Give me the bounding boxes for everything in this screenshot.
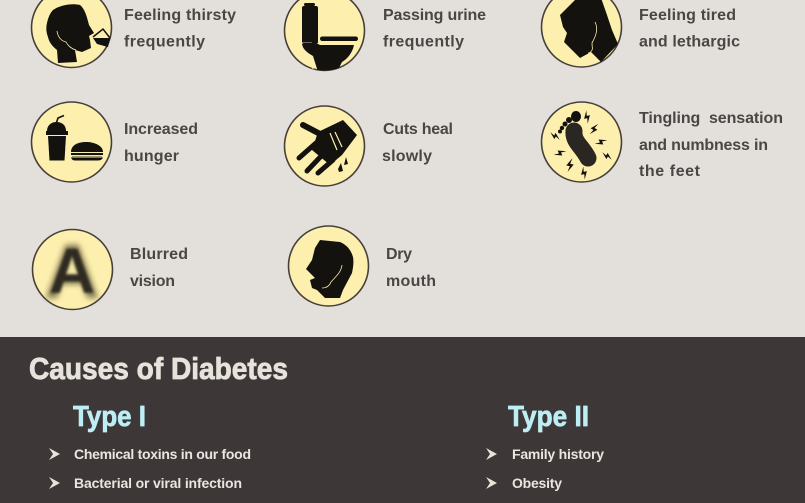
label: cuts heal slowly: Cuts heal [383, 121, 453, 138]
symptom: passing urine [284, 0, 486, 72]
heading: causes of diabetes: Causes of Diabetes [29, 351, 288, 386]
symptom: feeling thirsty [32, 0, 236, 68]
column: type I [49, 401, 251, 491]
label: increased hunger: hunger [124, 148, 179, 165]
label: passing urine frequently: Passing urine [383, 7, 486, 24]
bullet: bacterial or viral infection: Bacterial or viral infection [74, 475, 242, 491]
subheading: type I: Type I [73, 401, 146, 433]
symptom: dry mouth [288, 226, 436, 306]
icon: head drinking water [32, 0, 112, 68]
icon: foot with lightning bolts [542, 102, 622, 182]
icon: toilet [284, 0, 364, 72]
label: dry mouth [386, 246, 436, 290]
symptom: increased hunger [32, 102, 198, 182]
bullet: chemical toxins: Chemical toxins in our food [74, 446, 251, 462]
label: cuts heal slowly: slowly [382, 148, 432, 165]
label: feeling thirsty frequently: frequently [124, 34, 205, 50]
symptom: cuts heal slowly [284, 106, 453, 186]
icon: cut hand [284, 106, 364, 186]
icon: blurred letter A: A [49, 235, 95, 307]
subheading: type II: Type II [508, 401, 589, 433]
label: blurred vision [130, 246, 188, 290]
label: increased hunger: Increased [124, 121, 198, 138]
label: cuts heal slowly [382, 121, 453, 165]
label: tingling sensation and numbness in the feet [639, 110, 783, 180]
label: passing urine frequently [383, 7, 486, 50]
label: feeling tired and lethargic: and lethargic [639, 34, 740, 50]
label: dry mouth: Dry [386, 246, 412, 263]
label: blurred vision: Blurred [130, 246, 188, 263]
label: passing urine frequently: frequently [383, 34, 464, 50]
label: feeling tired and lethargic [639, 7, 740, 50]
icon: head bowed [542, 0, 622, 67]
label: tingling sensation and numbness in the feet: Tingling sensation [639, 110, 783, 127]
icon: blurred letter A: A [44, 227, 100, 315]
label: dry mouth: mouth [386, 273, 436, 290]
label: feeling tired and lethargic: Feeling tired [639, 7, 736, 24]
icon: head in profile [288, 226, 368, 306]
label: tingling sensation and numbness in the feet: and numbness in [639, 137, 768, 154]
panel: causes of diabetes [0, 337, 805, 503]
bullet: obesity: Obesity [512, 475, 562, 491]
symptom: tingling sensation [542, 102, 783, 182]
column: type II [486, 401, 604, 491]
label: feeling thirsty frequently: Feeling thirsty [124, 7, 236, 24]
label: blurred vision: vision [130, 273, 175, 290]
label: increased hunger [124, 121, 198, 165]
icon: drink and burger [32, 102, 112, 182]
symptom: blurred vision [32, 227, 188, 315]
symptom: feeling tired [542, 0, 740, 67]
label: tingling sensation and numbness in the feet: the feet [639, 163, 701, 180]
bullet: family history: Family history [512, 446, 604, 462]
label: feeling thirsty frequently [124, 7, 236, 50]
